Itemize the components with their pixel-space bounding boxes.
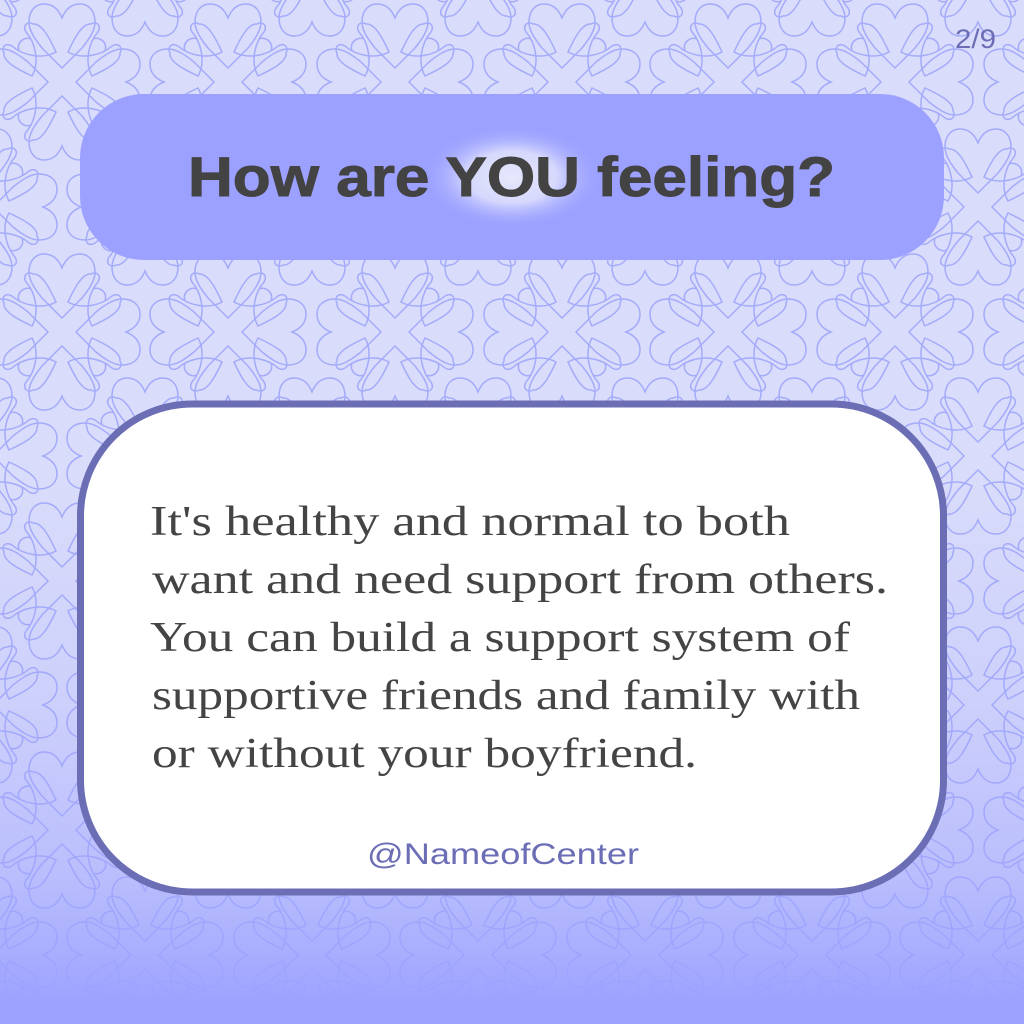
body text [150, 499, 888, 777]
card background [80, 404, 944, 892]
glow behind YOU [422, 125, 602, 229]
header pill [80, 94, 944, 260]
title: How are YOU feeling? [188, 145, 835, 208]
body text: want and need support from others. [152, 557, 888, 603]
header panel [80, 94, 944, 260]
page number: 2/9 [955, 24, 996, 54]
body text: supportive friends and family with [152, 673, 860, 719]
body text: or without your boyfriend. [152, 731, 697, 777]
body text: You can build a support system of [150, 615, 850, 661]
message card [80, 404, 944, 892]
handle: @NameofCenter [367, 838, 639, 871]
background bottom gradient [0, 480, 1024, 1024]
body text: It's healthy and normal to both [150, 499, 790, 545]
